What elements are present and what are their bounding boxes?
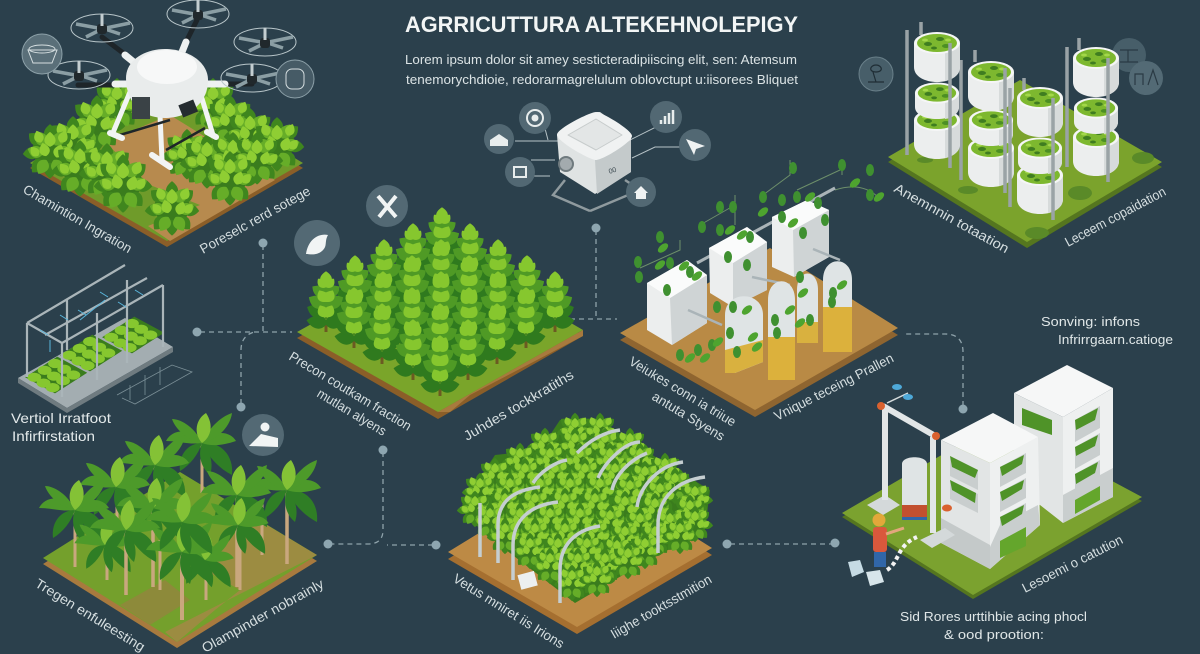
label: vetus: Vetus mniret iis Irions (450, 571, 567, 652)
icon: home (626, 177, 656, 207)
panel: drone over crop plot (20, 0, 314, 257)
caption: sid rores: Sid Rores urttihbie acing phocl (900, 609, 1087, 624)
planter stacks (914, 32, 1119, 214)
label: veiukes: antuta Styens (649, 389, 728, 444)
label: leceem: Leceem copaidation (1062, 184, 1168, 250)
panel: central crop field (286, 207, 583, 444)
icon: cursor (679, 129, 711, 161)
crate (517, 571, 538, 590)
panel: arched crop tunnels (448, 413, 714, 652)
icon: chart (650, 101, 682, 133)
drone (48, 0, 296, 167)
hub box: 00 (608, 167, 618, 176)
icon: tools (366, 185, 408, 227)
label (11, 410, 111, 444)
icon: gauge (1129, 61, 1163, 95)
icon: tree (859, 57, 893, 91)
label: juhdes: Juhdes tockkratiths (461, 367, 576, 444)
icon: worker (242, 414, 284, 456)
label: vnique: Vnique teceing Prallen (772, 350, 896, 424)
title: AGRRICUTTURA ALTEKEHNOLEPIGY (405, 12, 798, 37)
side pipes (688, 249, 840, 325)
intro text: Lorem ipsum dolor sit amey sesticteradipiiscing elit, sen: Atemsum (405, 52, 797, 67)
foliage (634, 159, 886, 365)
crops (25, 317, 164, 393)
connector lines (200, 230, 963, 545)
crop bushes (22, 78, 305, 236)
panel: palm plantation (32, 413, 326, 654)
top pipe (697, 188, 835, 263)
connector nodes (192, 224, 968, 550)
label: Infirfirstation (12, 428, 95, 444)
panel: tower garden (859, 22, 1168, 256)
intro text (405, 52, 798, 87)
panel: sensor hub (484, 101, 711, 211)
label: lesoemi: Lesoemi o catution (1020, 532, 1125, 596)
tower back (1014, 365, 1113, 523)
hub legs (553, 180, 640, 211)
tunnel arches (480, 430, 705, 603)
label: veiukes: Veiukes conn ia triiue (626, 354, 739, 429)
icon: target (519, 102, 551, 134)
intro text: tenemorychdioie, redorarmagrelulum oblovctupt u:iisorees Bliquet (406, 72, 798, 87)
schematic sketch (117, 365, 192, 404)
vines (640, 160, 878, 268)
icon: house (484, 124, 514, 154)
caption: sid rores (900, 609, 1087, 642)
palms (39, 413, 321, 620)
label: chamintion: Chamintion Ingration (20, 182, 135, 256)
rack tanks (647, 200, 829, 345)
label: olampinder: Olampinder nobrainly (199, 576, 326, 654)
irrigation gantry (867, 384, 955, 548)
ground patches (917, 152, 1154, 239)
label: tregen: Tregen enfuleesting (32, 576, 148, 654)
caption: sid rores: & ood prootion: (944, 627, 1044, 642)
icon: sensor frame (276, 60, 314, 98)
tower front (941, 413, 1040, 569)
label: precon: Precon coutkam fraction (286, 349, 414, 434)
crop rows (304, 207, 577, 396)
icon: panel (1112, 38, 1146, 72)
nutrient columns (725, 261, 852, 380)
back poles (907, 22, 1079, 180)
label: anemnnin: Anemnnin totaation (892, 181, 1012, 256)
hub links (515, 117, 680, 176)
frame (27, 265, 163, 397)
panel: hydroponic racks (620, 159, 898, 444)
icon: bowl (22, 34, 62, 74)
panel: greenhouse irrigation (11, 265, 192, 444)
icon: camera (505, 157, 535, 187)
worker (848, 514, 917, 586)
bushes (457, 413, 713, 601)
label: Vertiol Irratfoot (11, 410, 111, 426)
label: poreselc: Poreselc rerd sotege (197, 183, 313, 257)
caption: sonving: Sonving: infons (1041, 314, 1141, 329)
foliage mass (462, 420, 710, 603)
caption: sonving: Infrirrgaarn.catioge (1058, 332, 1173, 347)
label: precon: mutlan alyens (314, 386, 389, 439)
front poles (950, 43, 1108, 220)
caption: sonving (1041, 314, 1173, 347)
icon: leaf hand (294, 220, 340, 266)
sprinklers (40, 290, 143, 352)
hub box (557, 112, 632, 194)
panel: vertical farm towers (842, 365, 1142, 599)
label: iighe: Iiighe tooktsstmition (608, 572, 714, 642)
